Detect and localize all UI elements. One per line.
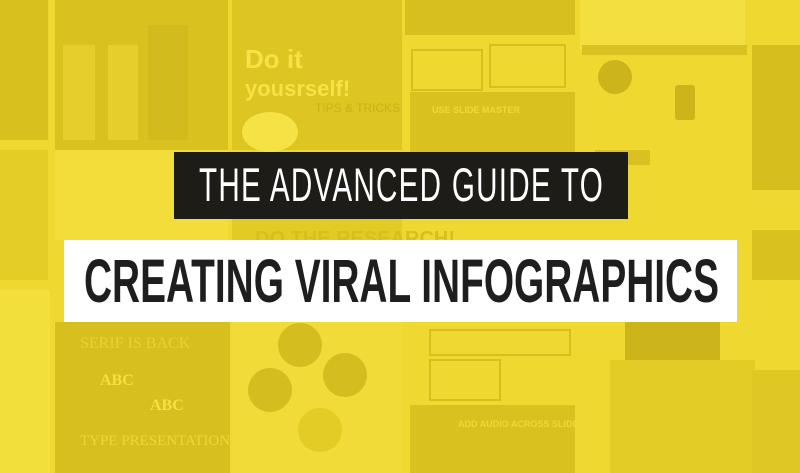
- panel column A: [0, 0, 50, 473]
- panel column D: ADD AUDIO ACROSS SLIDES: [458, 419, 584, 429]
- panel column B: ABC: [100, 372, 134, 389]
- panel column E: [580, 0, 755, 473]
- panel column B: SERIF IS BACK: [80, 335, 191, 352]
- panel column F: [752, 45, 800, 473]
- panel column C: TIPS & TRICKS: [315, 101, 400, 115]
- panel column D: USE SLIDE MASTER: [432, 105, 521, 115]
- panel column B: ABC: [150, 397, 184, 414]
- panel column B: [55, 0, 230, 473]
- panel column B: TYPE PRESENTATION: [80, 433, 230, 449]
- panel column D: [405, 0, 584, 473]
- heading box: the advanced guide to: [174, 152, 628, 219]
- panel column C: yousrself!: [245, 76, 350, 101]
- panel column C: [232, 0, 455, 473]
- panel column C: Do it: [245, 44, 303, 74]
- panel column C: DO THE RESEARCH!: [255, 228, 455, 250]
